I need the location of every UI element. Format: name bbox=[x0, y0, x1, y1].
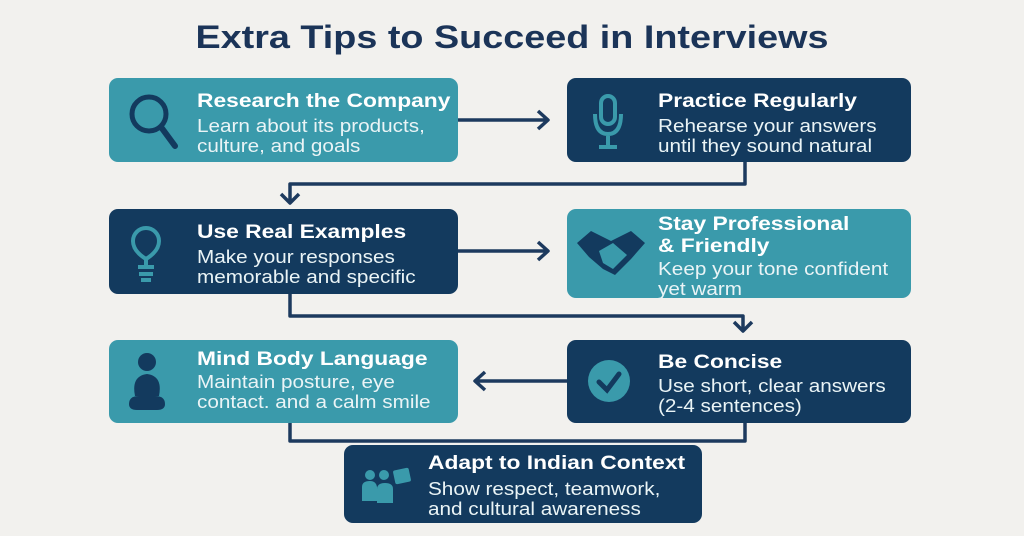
panel: professional: yet warm bbox=[658, 278, 742, 298]
panel: indian context: Show respect, teamwork, bbox=[428, 479, 660, 499]
panel: research: Research the Company bbox=[197, 91, 450, 112]
icon: microphone bbox=[593, 94, 623, 149]
panel: concise: Use short, clear answers bbox=[658, 376, 886, 396]
panel: indian context bbox=[344, 445, 702, 523]
panel: research: Learn about its products, bbox=[197, 116, 425, 136]
panel: examples: Use Real Examples bbox=[197, 222, 406, 243]
panel: body language: contact. and a calm smile bbox=[197, 392, 431, 412]
panel: concise: Be Concise bbox=[658, 352, 782, 373]
icon: person bbox=[129, 353, 165, 410]
panel: research: culture, and goals bbox=[197, 136, 360, 156]
panel: professional: & Friendly bbox=[658, 236, 769, 257]
panel: concise: (2-4 sentences) bbox=[658, 396, 802, 416]
panel: concise bbox=[567, 340, 911, 423]
panel: professional bbox=[567, 209, 911, 298]
panel: practice: until they sound natural bbox=[658, 136, 872, 156]
icon: check bbox=[588, 360, 630, 402]
panel: body language bbox=[109, 340, 458, 423]
panel: research bbox=[109, 78, 458, 162]
icon: magnifier bbox=[130, 94, 178, 149]
icon: bulb bbox=[131, 226, 161, 282]
panel: examples bbox=[109, 209, 458, 294]
panel: indian context: Adapt to Indian Context bbox=[428, 453, 685, 474]
panel: body language: Mind Body Language bbox=[197, 349, 428, 370]
panel: practice bbox=[567, 78, 911, 162]
panel: body language: Maintain posture, eye bbox=[197, 372, 395, 392]
icon: handshake bbox=[577, 231, 645, 275]
panel: examples: Make your responses bbox=[197, 247, 395, 267]
icon: people bbox=[362, 468, 411, 503]
panel: professional: Stay Professional bbox=[658, 214, 849, 235]
panel: indian context: and cultural awareness bbox=[428, 498, 641, 518]
title: Extra Tips to Succeed in Interviews bbox=[195, 19, 829, 55]
panel: professional: Keep your tone confident bbox=[658, 259, 888, 279]
panel: practice: Practice Regularly bbox=[658, 91, 857, 112]
panel: examples: memorable and specific bbox=[197, 266, 416, 286]
panel: practice: Rehearse your answers bbox=[658, 116, 877, 136]
